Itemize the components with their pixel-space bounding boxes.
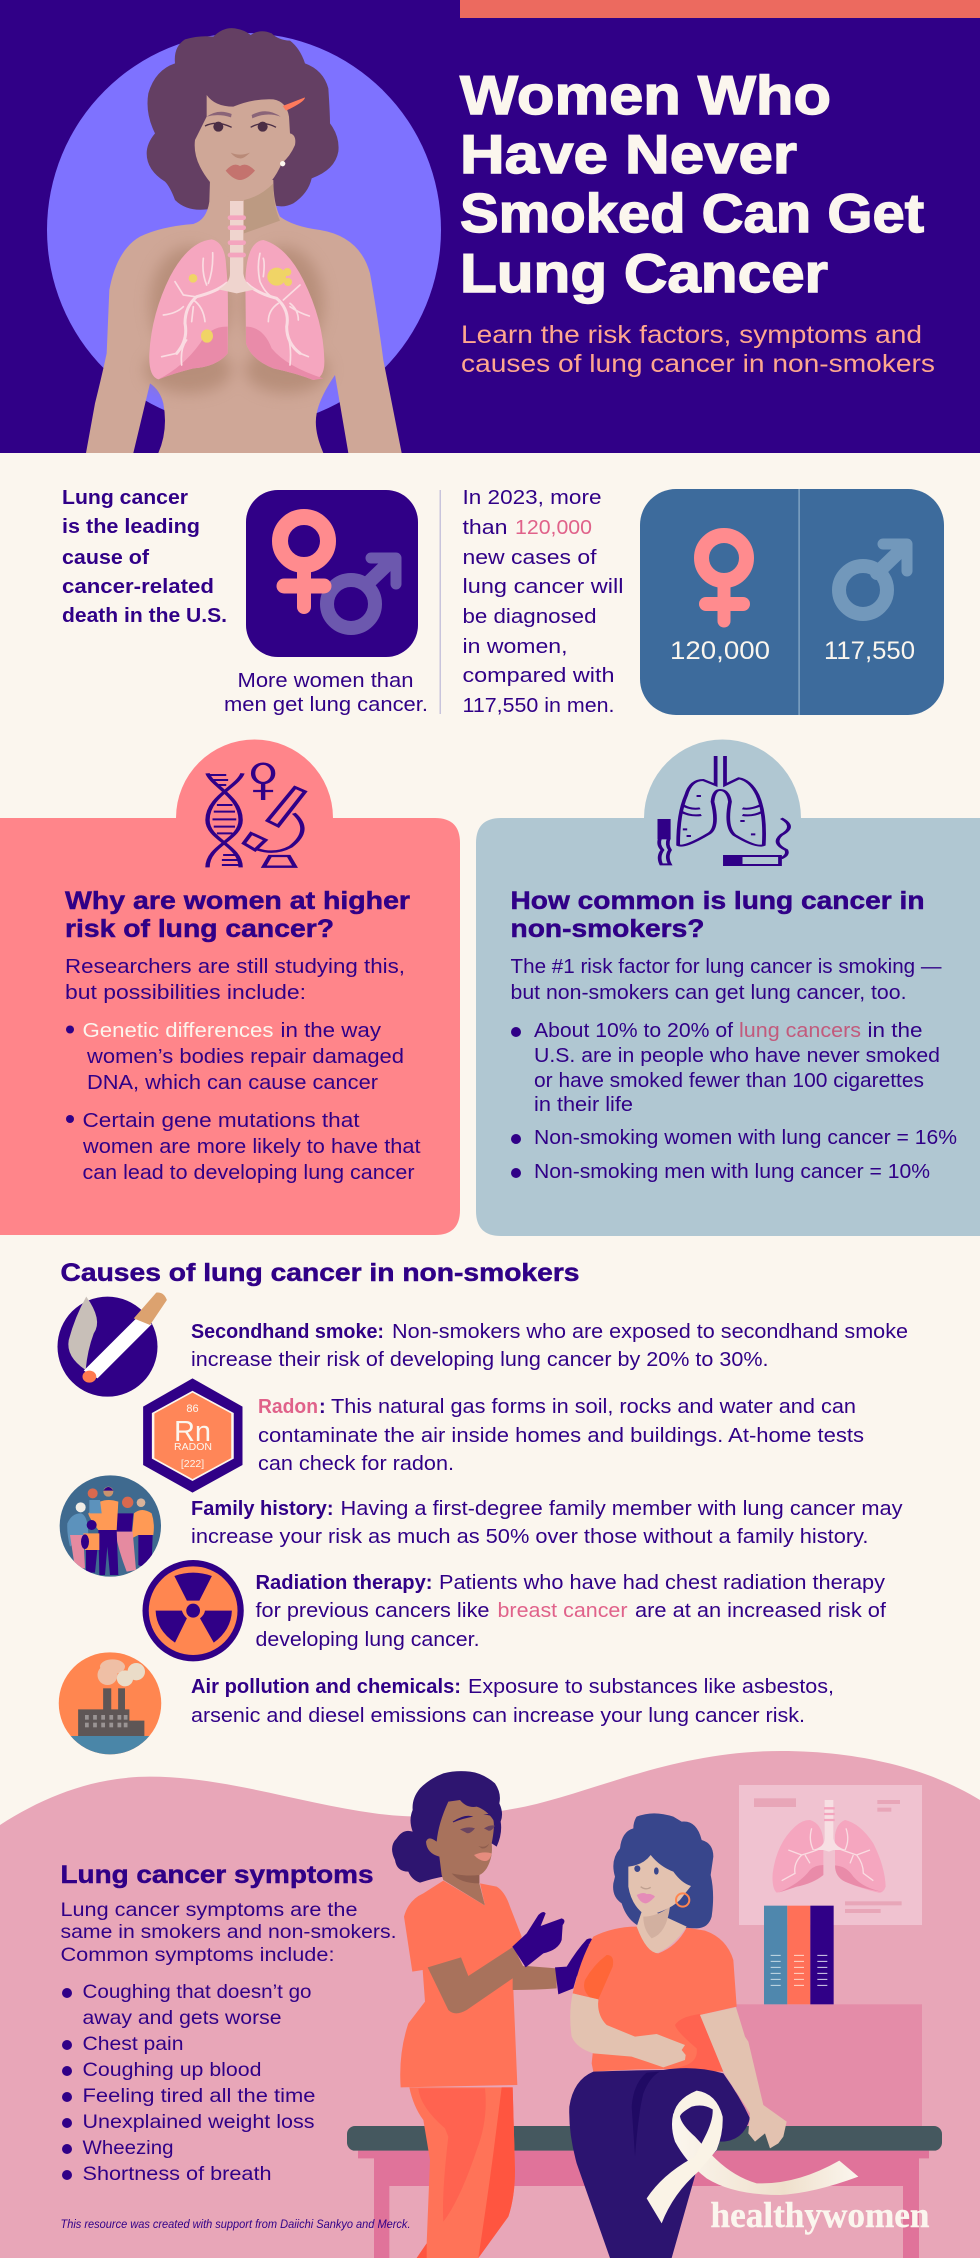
icon: awareness ribbon: [647, 2091, 858, 2223]
title: Women Who: [460, 64, 831, 126]
text: radon: [258, 1396, 864, 1475]
list: symptoms: Coughing up blood: [82, 2059, 262, 2081]
chart: case counts by sex: 117,550: [824, 637, 915, 665]
icon: radon element tile: RADON: [174, 1441, 212, 1453]
text: air pollution: Air pollution and chemicals:: [191, 1676, 461, 1698]
bullet: genetic differences: [66, 1020, 404, 1094]
title: Have Never: [460, 123, 797, 185]
icon: lungs and cigarettes: [659, 756, 789, 865]
books: [764, 1906, 834, 2004]
bullet: 10 to 20 percent: in their life: [534, 1094, 633, 1116]
list: symptoms: Chest pain: [82, 2033, 184, 2055]
heading: risk of lung cancer?: [65, 915, 334, 943]
logo: healthywomen: healthywomen: [710, 2195, 930, 2235]
text: intro: same in smokers and non-smokers.: [60, 1921, 396, 1943]
heading: causes: Causes of lung cancer in non-smokers: [60, 1259, 580, 1287]
text: secondhand smoke: increase their risk of developing lung cancer by 20% to 30%.: [191, 1349, 768, 1371]
panel: lung cancer symptoms: [0, 1751, 980, 2258]
text: intro: but non-smokers can get lung cancer, too.: [510, 982, 906, 1004]
icon: radon element tile: 86: [186, 1403, 199, 1415]
icon: radiation symbol: [142, 1560, 244, 1661]
text: intro: [65, 956, 405, 1004]
text: intro: but possibilities include:: [65, 982, 306, 1004]
bullet: gene mutations: can lead to developing lung cancer: [82, 1162, 415, 1184]
icon: factory: [56, 1652, 162, 1756]
text: lung cancer is the leading cause: [62, 487, 227, 627]
chart: case counts by sex: 120,000: [670, 637, 770, 665]
text: radiation therapy: breast cancer: [498, 1600, 628, 1622]
bullet: 10 to 20 percent: [511, 1020, 940, 1116]
icon: DNA, female sign, microscope: [208, 764, 305, 867]
bullet: gene mutations: [66, 1110, 421, 1184]
bullet: women 16 percent: Non-smoking women with lung cancer = 16%: [534, 1127, 957, 1149]
text: 2023 new case counts: be diagnosed: [462, 606, 596, 628]
list: symptoms: Shortness of breath: [82, 2163, 272, 2185]
list: symptoms: Coughing that doesn’t go: [82, 1981, 312, 2003]
heading: [65, 887, 410, 943]
text: secondhand smoke: Non-smokers who are exposed to secondhand smoke: [392, 1321, 908, 1343]
poster: lung diagram: [739, 1785, 922, 1925]
text: family history: Family history:: [191, 1498, 334, 1520]
panel: header: [0, 0, 980, 453]
text: radiation therapy: Radiation therapy:: [256, 1572, 432, 1594]
text: secondhand smoke: [191, 1321, 908, 1371]
text: 2023 new case counts: In 2023, more: [462, 487, 602, 509]
bullet: men 10 percent: Non-smoking men with lung cancer = 10%: [534, 1161, 930, 1183]
icon: radon element tile: [222]: [181, 1458, 204, 1470]
text: radon: can check for radon.: [258, 1453, 454, 1475]
text: air pollution: arsenic and diesel emissions can increase your lung cancer risk.: [191, 1705, 805, 1727]
figure: patient: [569, 1813, 787, 2258]
bullet: 10 to 20 percent: About 10% to 20% of: [534, 1020, 733, 1042]
bullet: 10 to 20 percent: or have smoked fewer than 100 cigarettes: [534, 1070, 924, 1092]
panel: leading cause statement: [62, 487, 944, 717]
exam table: [347, 2126, 942, 2258]
text: intro: [60, 1899, 396, 1966]
icon: radon element tile: Rn: [174, 1416, 211, 1448]
list: symptoms: Unexplained weight loss: [82, 2111, 315, 2133]
text: lung cancer is the leading cause: is the leading: [62, 516, 200, 538]
text: air pollution: Exposure to substances like asbestos,: [468, 1676, 834, 1698]
chart: case counts by sex: [640, 489, 944, 715]
heading: non-smokers?: [510, 915, 704, 943]
text: air pollution: [191, 1676, 834, 1727]
title: [460, 64, 924, 304]
text: radiation therapy: developing lung cancer.: [256, 1629, 480, 1651]
heading: Why are women at higher: [65, 887, 410, 915]
caption: more women than men: men get lung cancer.: [224, 694, 428, 716]
text: lung cancer is the leading cause: cancer-related: [62, 576, 214, 598]
text: lung cancer is the leading cause: cause of: [62, 547, 149, 569]
list: symptoms: Wheezing: [82, 2137, 174, 2159]
text: radiation therapy: [256, 1572, 886, 1651]
subtitle: causes of lung cancer in non-smokers: [461, 350, 935, 378]
cabinet: [736, 2004, 922, 2128]
text: heading: Lung cancer symptoms: [60, 1861, 374, 1889]
bullet: genetic differences: Genetic differences: [82, 1020, 274, 1042]
text: 2023 new case counts: in women,: [462, 636, 568, 658]
bullet: 10 to 20 percent: lung cancers: [739, 1020, 861, 1042]
text: lung cancer is the leading cause: Lung cancer: [62, 487, 188, 509]
text: secondhand smoke: Secondhand smoke:: [191, 1321, 384, 1343]
periwinkle circle behind woman: [47, 33, 441, 427]
bullet: 10 to 20 percent: in the: [868, 1020, 922, 1042]
list: symptoms: Feeling tired all the time: [82, 2085, 316, 2107]
coral accent bar: [460, 0, 980, 18]
icon: family group: [60, 1475, 161, 1577]
illustration: woman with lungs: [86, 28, 402, 453]
bullet: genetic differences: in the way: [280, 1020, 381, 1042]
heading: How common is lung cancer in: [510, 887, 924, 915]
bullet: genetic differences: DNA, which can cause cancer: [87, 1072, 378, 1094]
text: radon: This natural gas forms in soil, rocks and water and can: [331, 1396, 856, 1418]
icon: cigarette: [58, 1293, 167, 1397]
text: 2023 new case counts: lung cancer will: [462, 576, 624, 598]
footnote: This resource was created with support from Daiichi Sankyo and Merck.: [60, 2219, 410, 2231]
subtitle: Learn the risk factors, symptoms and: [461, 321, 922, 349]
heading: [510, 887, 924, 943]
text: 2023 new case counts: compared with: [462, 665, 614, 687]
title: Smoked Can Get: [460, 182, 924, 244]
text: intro: Lung cancer symptoms are the: [60, 1899, 358, 1921]
text: family history: Having a first-degree family member with lung cancer may: [340, 1498, 902, 1520]
list: symptoms: [62, 1981, 316, 2185]
title: Lung Cancer: [460, 242, 828, 304]
panel: why women at higher risk: [0, 740, 460, 1235]
panel: how common in non-smokers: [476, 740, 980, 1236]
text: intro: The #1 risk factor for lung cancer is smoking —: [510, 956, 942, 978]
text: family history: [191, 1498, 902, 1548]
text: 2023 new case counts: 120,000: [515, 517, 592, 539]
text: intro: Common symptoms include:: [60, 1944, 334, 1966]
text: 2023 new case counts: new cases of: [462, 547, 597, 569]
text: radiation therapy: are at an increased risk of: [635, 1600, 886, 1622]
text: radon: contaminate the air inside homes and buildings. At-home tests: [258, 1425, 864, 1447]
text: radon: Radon: [258, 1396, 318, 1418]
text: intro: [510, 956, 942, 1004]
icon: gender symbols on purple tile: [246, 490, 418, 657]
illustration: exam room scene: [347, 1771, 942, 2258]
figure: nurse: [392, 1771, 600, 2258]
bullet: gene mutations: Certain gene mutations that: [82, 1110, 360, 1132]
text: radiation therapy: Patients who have had chest radiation therapy: [439, 1572, 885, 1594]
bullet: 10 to 20 percent: U.S. are in people who have never smoked: [534, 1045, 940, 1067]
list: symptoms: away and gets worse: [82, 2007, 282, 2029]
text: family history: increase your risk as much as 50% over those without a family history.: [191, 1526, 868, 1548]
text: lung cancer is the leading cause: death in the U.S.: [62, 605, 227, 627]
bullet: gene mutations: women are more likely to have that: [82, 1136, 421, 1158]
text: 2023 new case counts: 117,550 in men.: [462, 695, 614, 717]
text: 2023 new case counts: [462, 487, 624, 717]
bullet: genetic differences: women’s bodies repair damaged: [86, 1046, 404, 1068]
text: radon: :: [319, 1396, 326, 1418]
text: intro: Researchers are still studying this,: [65, 956, 405, 978]
text: radiation therapy: for previous cancers like: [256, 1600, 490, 1622]
caption: more women than men: [224, 670, 428, 716]
text: 2023 new case counts: than: [462, 517, 508, 539]
subtitle: [461, 321, 935, 378]
caption: more women than men: More women than: [238, 670, 414, 692]
icon: radon element tile: [143, 1378, 242, 1493]
